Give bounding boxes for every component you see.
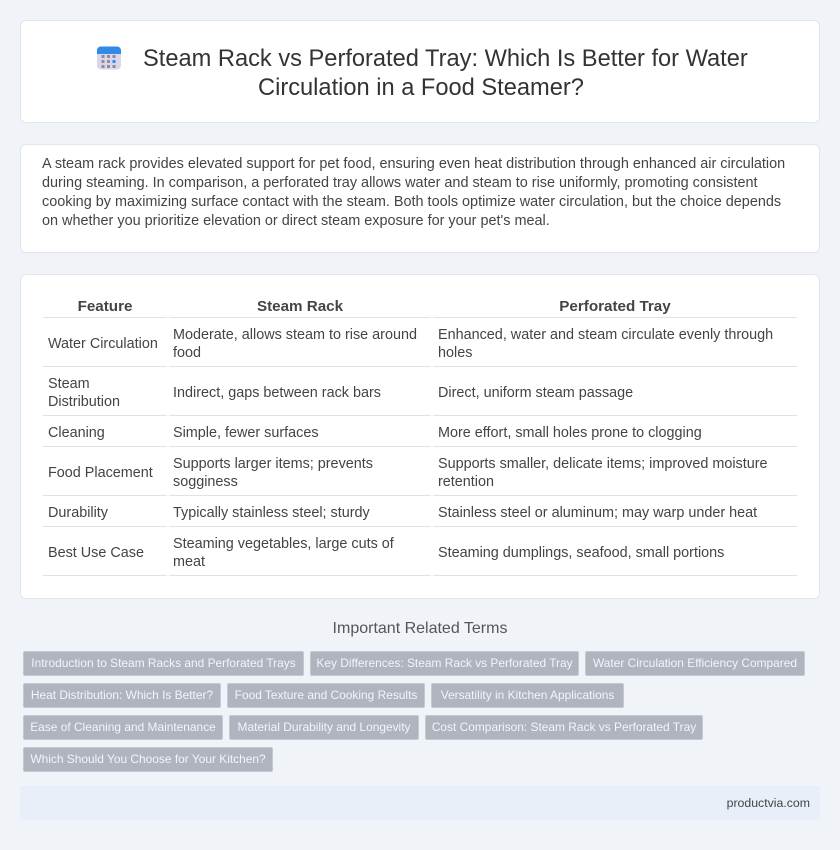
intro panel	[20, 144, 820, 253]
row: cleaning: Cleaning	[48, 425, 105, 441]
icon: calendar grid	[97, 46, 121, 70]
row: food placement: Food Placement	[48, 465, 153, 481]
related term tags: Food Texture and Cooking Results	[235, 688, 417, 702]
row: best use case: Best Use Case	[48, 545, 144, 561]
comparison table panel	[20, 274, 820, 599]
comparison table panel: Typically stainless steel; sturdy	[173, 505, 370, 521]
intro text: cooking by maximizing surface contact with the steam. Both tools optimize water circulation, but the choice depends	[42, 194, 781, 210]
comparison table panel: Enhanced, water and steam circulate evenly through	[438, 327, 773, 343]
comparison table panel: Stainless steel or aluminum; may warp under heat	[438, 505, 757, 521]
comparison table panel: Direct, uniform steam passage	[438, 385, 633, 401]
comparison table panel: More effort, small holes prone to clogging	[438, 425, 702, 441]
row: durability: Durability	[48, 505, 108, 521]
related term tags: Introduction to Steam Racks and Perforated Trays	[31, 656, 296, 670]
comparison table panel: Supports larger items; prevents	[173, 456, 373, 472]
related term tags: Key Differences: Steam Rack vs Perforated Tray	[316, 656, 573, 670]
comparison table panel: Steaming vegetables, large cuts of	[173, 536, 394, 552]
intro text: A steam rack provides elevated support for pet food, ensuring even heat distribution through enhanced air circulation	[42, 156, 785, 172]
related term tags: Which Should You Choose for Your Kitchen?	[30, 752, 266, 766]
related terms heading: Important Related Terms	[333, 620, 507, 637]
comparison table panel: sogginess	[173, 474, 238, 490]
comparison table panel: Steam Rack	[257, 298, 343, 315]
comparison table panel: Simple, fewer surfaces	[173, 425, 319, 441]
related term tags: Cost Comparison: Steam Rack vs Perforated Tray	[432, 720, 696, 734]
intro text	[42, 156, 785, 229]
intro text: on whether you prioritize elevation or direct steam exposure for your pet's meal.	[42, 213, 550, 229]
comparison table panel: Moderate, allows steam to rise around	[173, 327, 417, 343]
footer bar	[20, 786, 820, 820]
row: steam distribution	[48, 376, 120, 410]
row: water circulation: Water Circulation	[48, 336, 158, 352]
related term tags: Ease of Cleaning and Maintenance	[30, 720, 216, 734]
comparison table panel: Indirect, gaps between rack bars	[173, 385, 381, 401]
comparison table panel: holes	[438, 345, 472, 361]
row: steam distribution: Steam	[48, 376, 90, 392]
related term tags: Heat Distribution: Which Is Better?	[31, 688, 213, 702]
comparison table panel: food	[173, 345, 201, 361]
title card	[20, 20, 820, 123]
heading	[143, 46, 748, 101]
table header row: Feature	[78, 298, 132, 315]
heading: Circulation in a Food Steamer?	[258, 75, 584, 101]
footer brand: productvia.com	[727, 796, 810, 810]
comparison table panel: Steaming dumplings, seafood, small portions	[438, 545, 724, 561]
comparison table panel: Supports smaller, delicate items; improved moisture	[438, 456, 768, 472]
related term tags: Versatility in Kitchen Applications	[441, 688, 614, 702]
comparison table panel: retention	[438, 474, 494, 490]
intro text: during steaming. In comparison, a perforated tray allows water and steam to rise uniformly, promoting consistent	[42, 175, 758, 191]
related term tags: Material Durability and Longevity	[238, 720, 410, 734]
row: steam distribution: Distribution	[48, 394, 120, 410]
comparison table panel: Perforated Tray	[559, 298, 671, 315]
related term tags: Water Circulation Efficiency Compared	[593, 656, 797, 670]
comparison table panel: meat	[173, 554, 205, 570]
heading: Steam Rack vs Perforated Tray: Which Is Better for Water	[143, 46, 748, 72]
